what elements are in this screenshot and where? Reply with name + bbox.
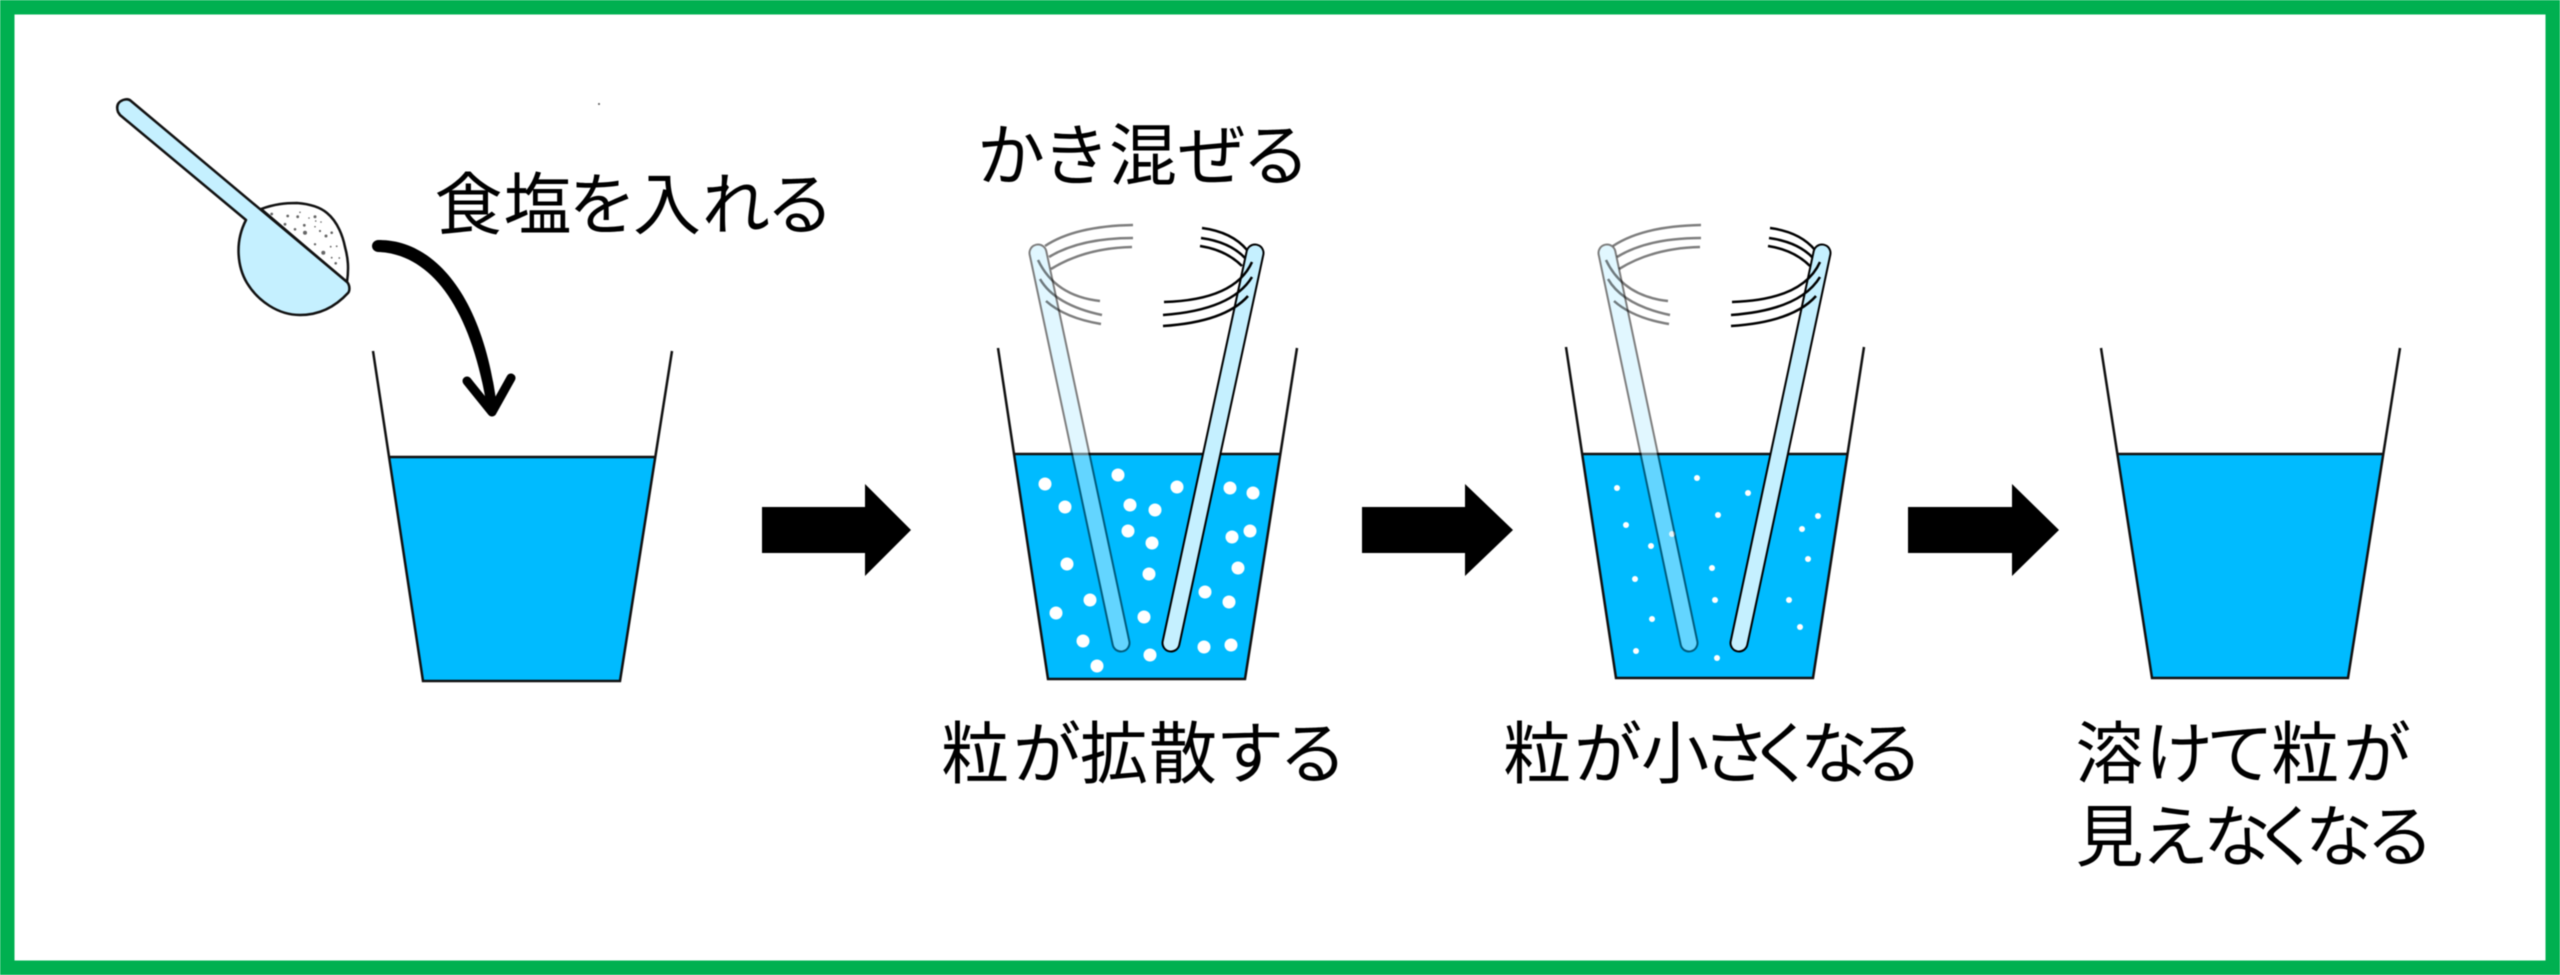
label: dissolved and invisible: 見えなくなる xyxy=(2075,800,2434,876)
label: particles diffuse: 粒が拡散する xyxy=(941,717,1347,793)
arrow: step 2 to 3 xyxy=(1362,484,1513,576)
solid rod with motion lines xyxy=(1163,228,1255,643)
label: dissolved and invisible: 溶けて粒が xyxy=(2075,717,2411,793)
speck xyxy=(598,103,600,105)
solid rod with motion lines xyxy=(1731,228,1822,643)
label: particles shrink: 粒が小さくなる xyxy=(1503,717,1923,793)
cup 1: water xyxy=(373,351,672,681)
cup 3: water with small salt grains and stirring rods xyxy=(1566,225,1864,678)
cup 4: clear water xyxy=(2101,348,2400,678)
spoon body xyxy=(117,99,349,315)
label: stir: かき混ぜる xyxy=(977,119,1310,195)
faded rod with motion lines xyxy=(1607,253,1689,643)
small grains xyxy=(1614,475,1821,661)
label: add salt: 食塩を入れる xyxy=(434,168,834,244)
faded rod with motion lines xyxy=(1038,253,1121,643)
arrow: step 3 to 4 xyxy=(1908,484,2059,576)
arrow: step 1 to 2 xyxy=(762,484,911,576)
large grains xyxy=(1038,468,1260,672)
salt grains xyxy=(270,212,340,265)
cup 2: water with large salt grains and stirring rods xyxy=(998,225,1297,679)
icon: measuring spoon with salt xyxy=(117,99,349,315)
label: dissolved and invisible xyxy=(2075,717,2434,876)
arrow: curved pour arrow xyxy=(372,240,511,412)
salt mound xyxy=(261,203,348,282)
